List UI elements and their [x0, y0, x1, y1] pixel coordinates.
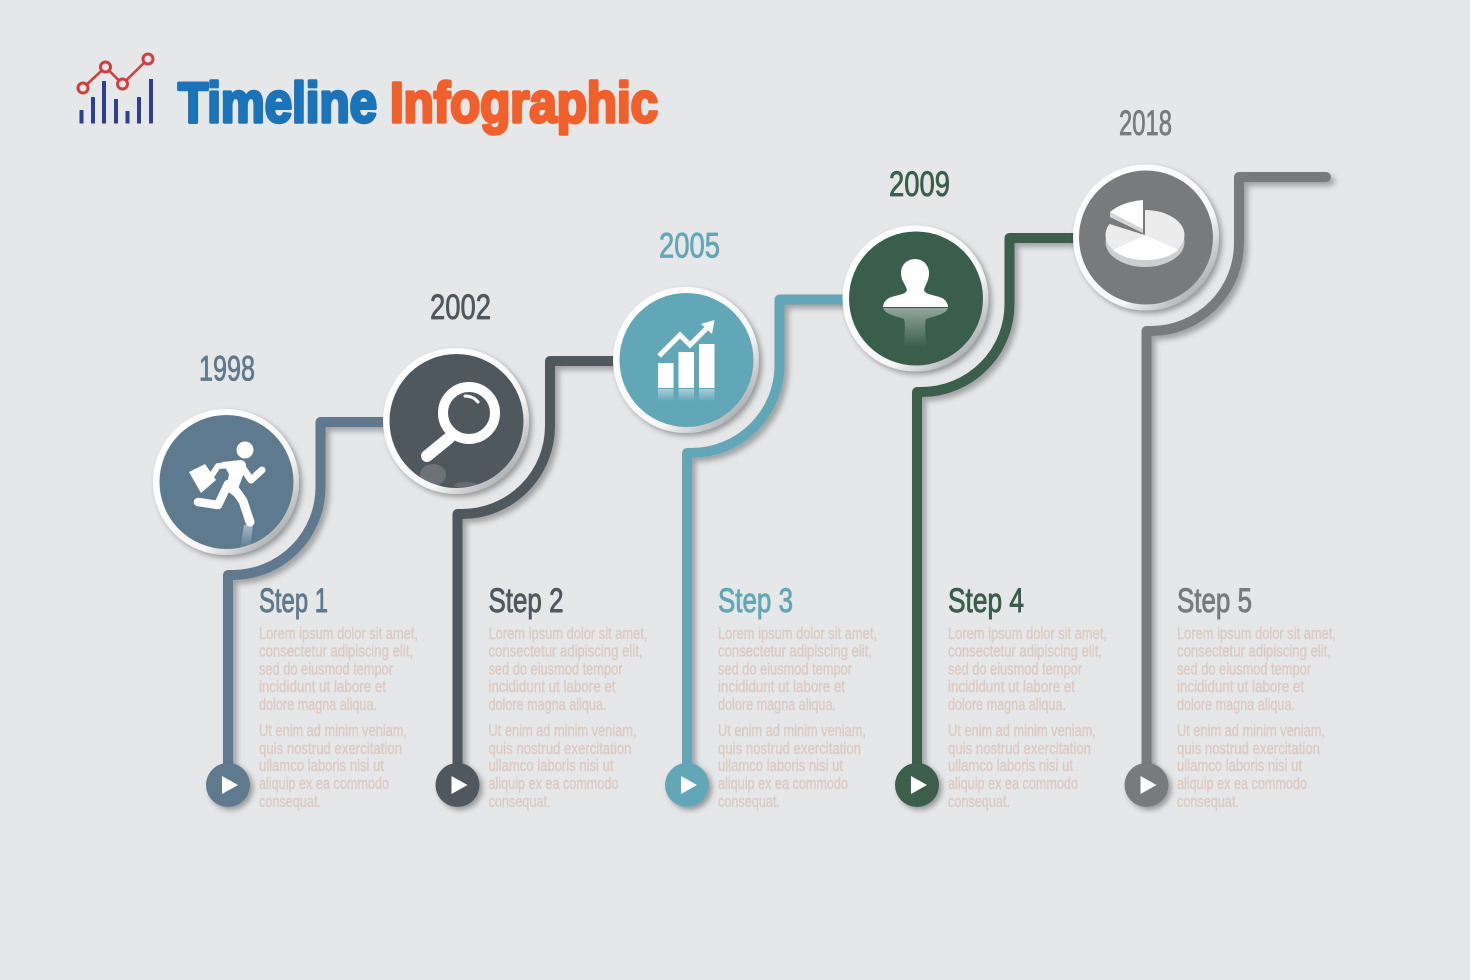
step 4	[842, 165, 1107, 811]
step 5	[1073, 104, 1336, 811]
step 1 body text: quis nostrud exercitation	[259, 739, 402, 758]
step 2 body text: aliquip ex ea commodo	[488, 774, 618, 793]
year 1998: 1998	[199, 350, 255, 388]
step 5 body text: sed do eiusmod tempor	[1177, 660, 1311, 678]
step 5 body text: Ut enim ad minim veniam,	[1177, 721, 1325, 740]
step 2 body text: Lorem ipsum dolor sit amet,	[488, 624, 648, 643]
play button 1	[206, 763, 250, 807]
step 1 body text: ullamco laboris nisi ut	[259, 756, 384, 775]
icon: magnifying glass	[420, 387, 495, 488]
step 2	[383, 288, 648, 811]
play button 4	[895, 763, 939, 807]
step 5 body text: consectetur adipiscing elit,	[1177, 642, 1331, 661]
connector line 4	[917, 238, 1080, 785]
circle badge 3	[613, 287, 759, 433]
step 3 body text: quis nostrud exercitation	[718, 739, 861, 758]
connector line 2	[458, 361, 620, 785]
step 2 body text: Ut enim ad minim veniam,	[488, 721, 636, 740]
year 2005: 2005	[659, 226, 720, 266]
step 3 body text: dolore magna aliqua.	[718, 695, 836, 714]
step 5 body text: Lorem ipsum dolor sit amet,	[1177, 624, 1336, 643]
step 1 body text: Ut enim ad minim veniam,	[259, 721, 407, 740]
step 3 body text: Lorem ipsum dolor sit amet,	[718, 624, 877, 643]
step 2 heading: Step 2	[488, 582, 564, 620]
step 5 body text: incididunt ut labore et	[1177, 677, 1304, 696]
step 4 body text: Lorem ipsum dolor sit amet,	[948, 624, 1107, 643]
step 5 body text	[1177, 624, 1336, 811]
circle badge 2	[383, 348, 529, 494]
step 1 body text: aliquip ex ea commodo	[259, 774, 389, 793]
step 4 body text: consectetur adipiscing elit,	[948, 642, 1102, 661]
step 1 body text	[259, 624, 418, 811]
play button 2	[436, 763, 480, 807]
year 2009: 2009	[889, 165, 950, 204]
step 2 body text	[488, 624, 648, 811]
step 2 body text: ullamco laboris nisi ut	[488, 756, 614, 775]
step 1 body text: dolore magna aliqua.	[259, 695, 377, 714]
icon: chart logo	[78, 54, 153, 124]
icon: running businessman	[189, 442, 262, 549]
title: Infographic	[390, 71, 658, 135]
step 1 body text: Lorem ipsum dolor sit amet,	[259, 624, 418, 643]
step 4 heading: Step 4	[948, 582, 1024, 620]
step 2 body text: sed do eiusmod tempor	[488, 660, 623, 678]
step 3 body text: consequat.	[718, 792, 780, 811]
step 2 body text: consequat.	[488, 792, 550, 811]
step 5 body text: dolore magna aliqua.	[1177, 695, 1295, 714]
circle badge 5	[1073, 164, 1219, 310]
title: Timeline	[178, 71, 377, 135]
step 3 body text: Ut enim ad minim veniam,	[718, 721, 866, 740]
year 2002: 2002	[430, 288, 491, 327]
step 2 body text: incididunt ut labore et	[488, 677, 616, 696]
step 4 body text: ullamco laboris nisi ut	[948, 756, 1073, 775]
step 3 body text: consectetur adipiscing elit,	[718, 642, 872, 661]
circle badge 1	[153, 409, 299, 555]
step 2 body text: consectetur adipiscing elit,	[488, 642, 642, 661]
step 3 body text: aliquip ex ea commodo	[718, 774, 848, 793]
connector line 5	[1146, 177, 1326, 785]
step 5 body text: consequat.	[1177, 792, 1239, 811]
step 1 body text: sed do eiusmod tempor	[259, 660, 393, 678]
year 2018: 2018	[1119, 104, 1172, 143]
step 1 body text: consequat.	[259, 792, 321, 811]
icon: person bust	[883, 259, 948, 347]
play button 5	[1124, 763, 1168, 807]
play button 3	[665, 763, 709, 807]
step 4 body text: dolore magna aliqua.	[948, 695, 1066, 714]
step 4 body text: Ut enim ad minim veniam,	[948, 721, 1096, 740]
step 1 body text: incididunt ut labore et	[259, 677, 386, 696]
step 5 body text: ullamco laboris nisi ut	[1177, 756, 1302, 775]
step 3 body text: ullamco laboris nisi ut	[718, 756, 843, 775]
step 4 body text: consequat.	[948, 792, 1010, 811]
step 4 body text: quis nostrud exercitation	[948, 739, 1091, 758]
step 2 body text: quis nostrud exercitation	[488, 739, 632, 758]
step 3 body text: incididunt ut labore et	[718, 677, 845, 696]
step 5 heading: Step 5	[1177, 582, 1252, 620]
step 2 body text: dolore magna aliqua.	[488, 695, 606, 714]
step 4 body text: sed do eiusmod tempor	[948, 660, 1082, 678]
step 3 heading: Step 3	[718, 582, 793, 620]
step 5 body text: aliquip ex ea commodo	[1177, 774, 1307, 793]
step 1 heading: Step 1	[259, 582, 328, 620]
connector line 1	[228, 422, 390, 785]
step 1	[153, 350, 418, 811]
step 3 body text: sed do eiusmod tempor	[718, 660, 852, 678]
icon: rising bar chart	[658, 320, 714, 401]
step 4 body text: aliquip ex ea commodo	[948, 774, 1078, 793]
step 4 body text: incididunt ut labore et	[948, 677, 1075, 696]
step 1 body text: consectetur adipiscing elit,	[259, 642, 413, 661]
icon: 3D pie chart	[1100, 200, 1184, 267]
step 5 body text: quis nostrud exercitation	[1177, 739, 1320, 758]
circle badge 4	[842, 226, 988, 372]
step 3	[613, 226, 877, 811]
connector line 3	[687, 300, 850, 785]
step 4 body text	[948, 624, 1107, 811]
step 3 body text	[718, 624, 877, 811]
